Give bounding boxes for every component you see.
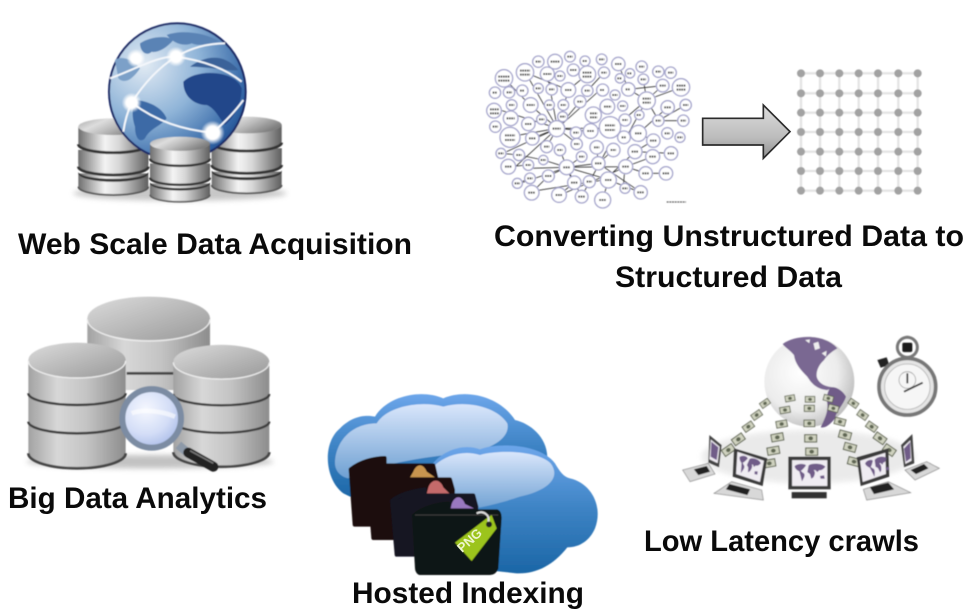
heading: hosted indexing: Hosted Indexing bbox=[352, 577, 584, 610]
panel: web scale data acquisition bbox=[18, 23, 412, 261]
heading: web scale data acquisition: Web Scale Data Acquisition bbox=[18, 228, 412, 261]
panel: converting unstructured data to structured data bbox=[487, 51, 964, 294]
heading: converting unstructured data to structured data: Structured Data bbox=[615, 261, 842, 294]
heading: converting unstructured data to structured data bbox=[494, 220, 964, 294]
label: PNG tag: PNG bbox=[454, 525, 485, 555]
icon: database cylinders with magnifier bbox=[27, 297, 273, 468]
chart: unstructured node graph bbox=[487, 51, 691, 208]
heading: big data analytics: Big Data Analytics bbox=[8, 482, 267, 515]
heading: converting unstructured data to structured data: Converting Unstructured Data to bbox=[494, 220, 964, 253]
arrow: unstructured to structured bbox=[703, 105, 790, 158]
panel: low latency crawls bbox=[644, 337, 939, 558]
icon: globe, laptops, money and stopwatch bbox=[683, 337, 939, 500]
icon: clouds with folders bbox=[328, 394, 598, 573]
panel: hosted indexing bbox=[328, 394, 598, 610]
panel: big data analytics bbox=[8, 297, 273, 515]
chart: structured grid of dots bbox=[797, 69, 922, 195]
icon: globe over database stacks bbox=[73, 23, 287, 202]
heading: low latency crawls: Low Latency crawls bbox=[644, 525, 919, 558]
